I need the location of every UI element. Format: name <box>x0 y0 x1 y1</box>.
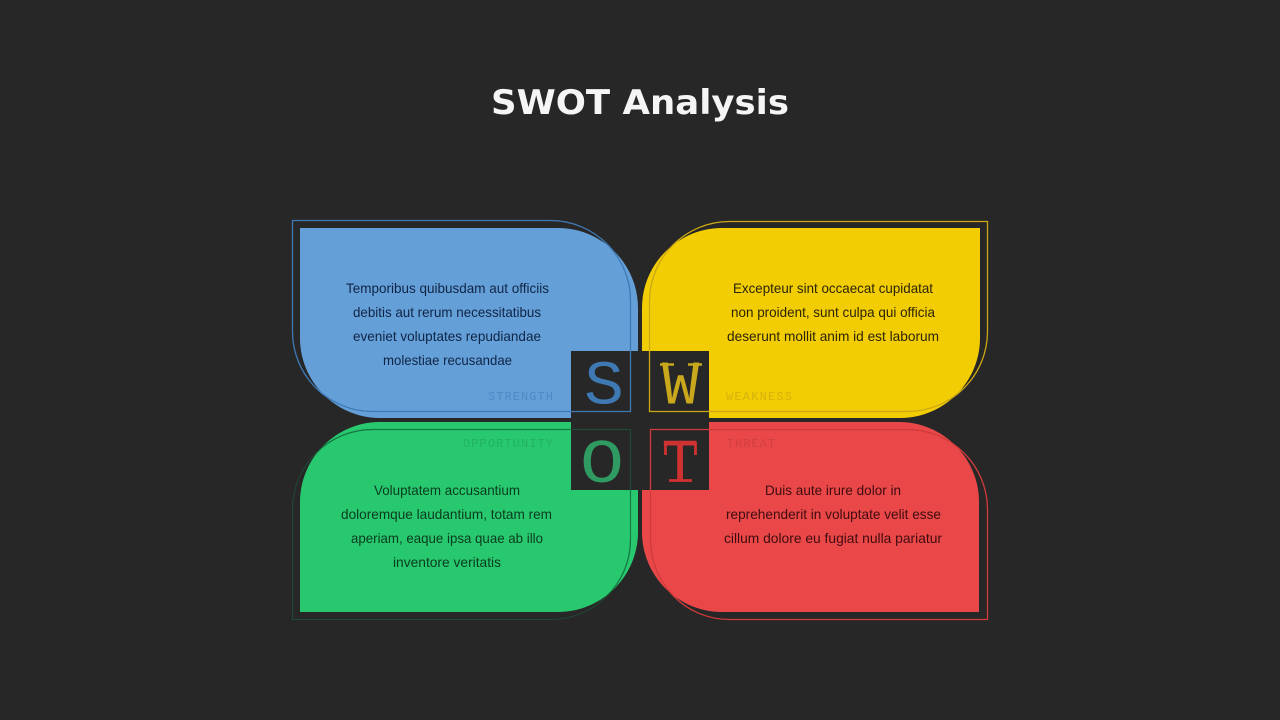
O box outline <box>571 430 630 490</box>
strength label: STRENGTH <box>488 390 553 404</box>
panel: opportunity <box>292 422 638 620</box>
threat text: reprehenderit in voluptate velit esse <box>726 506 941 522</box>
letter S: S <box>584 352 624 422</box>
opportunity outline over fill <box>318 428 632 595</box>
opportunity text: Voluptatem accusantium <box>374 482 520 498</box>
opportunity text: aperiam, eaque ipsa quae ab illo <box>351 530 543 546</box>
letter W: W <box>662 352 700 422</box>
letter T: T <box>662 430 699 501</box>
center SWOT block <box>571 351 709 501</box>
weakness outline <box>650 222 988 412</box>
strength fill <box>300 228 638 418</box>
opportunity label: OPPORTUNITY <box>463 437 553 451</box>
strength text: molestiae recusandae <box>383 352 512 368</box>
letter O: O <box>580 430 624 501</box>
weakness label: WEAKNESS <box>726 390 792 404</box>
strength text: debitis aut rerum necessitatibus <box>353 304 541 320</box>
weakness fill <box>642 228 980 418</box>
center dark square <box>571 351 709 490</box>
W box outline <box>650 351 709 412</box>
threat text: Duis aute irure dolor in <box>765 482 901 498</box>
strength outline <box>292 220 630 412</box>
threat text: cillum dolore eu fugiat nulla pariatur <box>724 530 942 546</box>
opportunity outline faint <box>292 430 630 620</box>
T box outline <box>650 430 709 490</box>
threat outline <box>650 430 988 620</box>
panel: strength <box>292 220 638 418</box>
panel: threat <box>642 422 988 620</box>
weakness text: Excepteur sint occaecat cupidatat <box>733 280 933 296</box>
opportunity text: inventore veritatis <box>393 554 501 570</box>
weakness text: deserunt mollit anim id est laborum <box>727 328 939 344</box>
title: SWOT Analysis <box>491 83 789 123</box>
weakness text: non proident, sunt culpa qui officia <box>731 304 935 320</box>
opportunity fill <box>300 422 638 612</box>
strength text: eveniet voluptates repudiandae <box>353 328 541 344</box>
panel: weakness <box>642 222 988 418</box>
S box outline <box>571 351 630 412</box>
opportunity text: doloremque laudantium, totam rem <box>341 506 552 522</box>
threat fill <box>642 422 979 612</box>
threat label: THREAT <box>727 437 775 451</box>
strength text: Temporibus quibusdam aut officiis <box>346 280 549 296</box>
